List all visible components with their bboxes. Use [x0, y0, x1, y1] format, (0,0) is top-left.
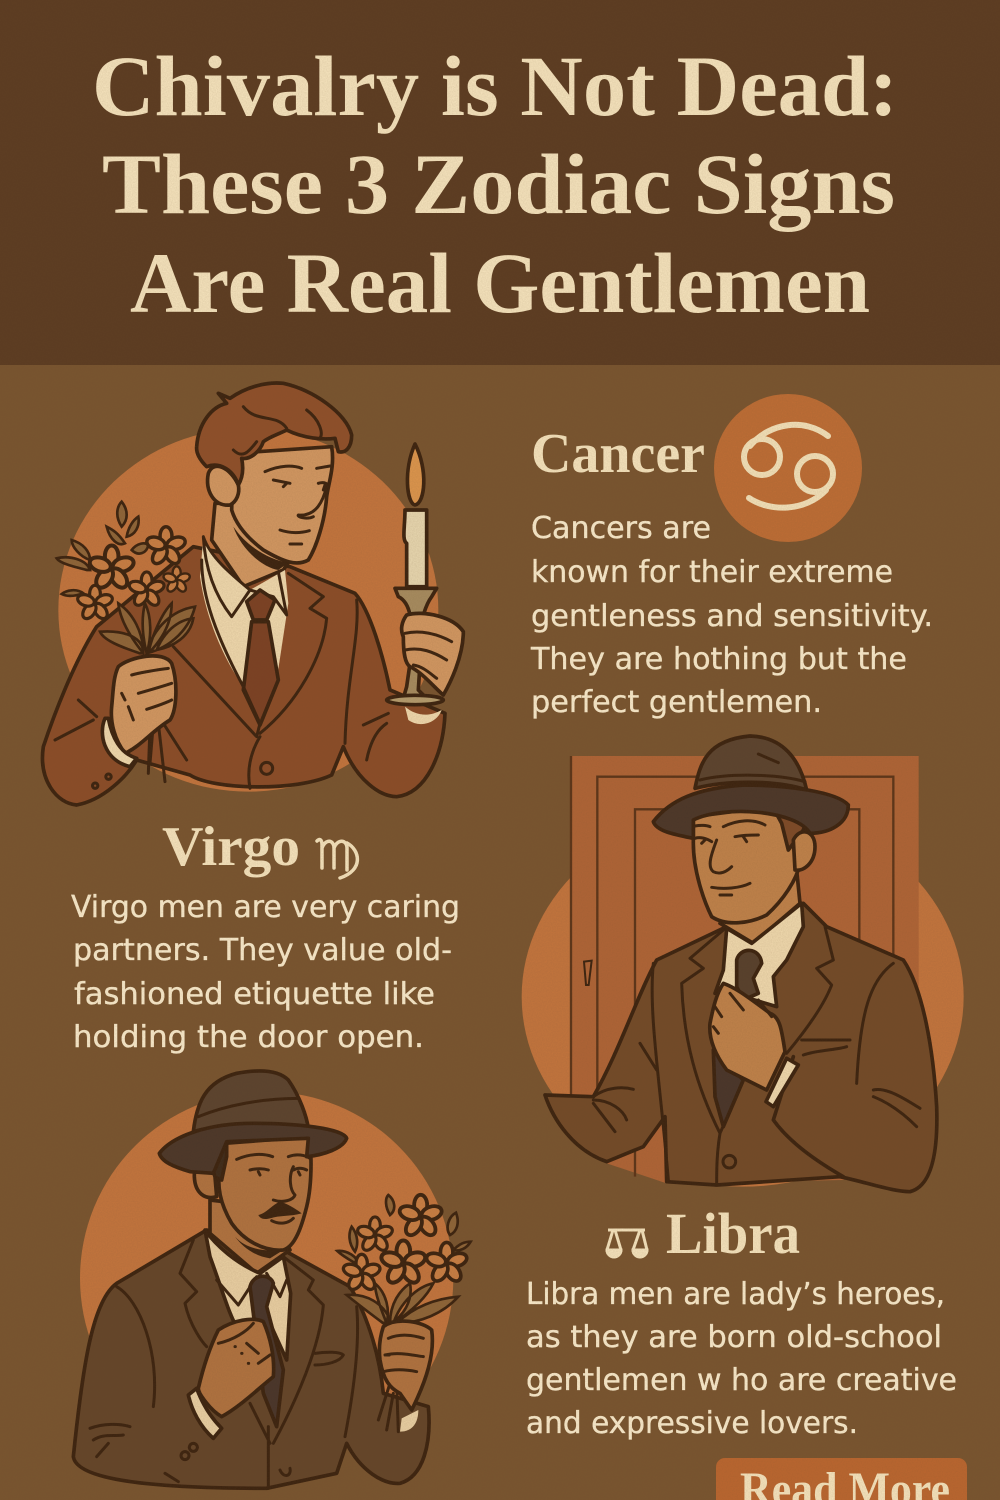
bouquet flowers	[398, 1195, 443, 1238]
collar lines	[217, 1273, 287, 1305]
neck	[212, 503, 297, 587]
illustration: man in hat at door	[522, 736, 964, 1192]
Cancer text: known for their extreme	[531, 555, 893, 590]
lower tie	[713, 1050, 743, 1127]
Cancer text	[530, 511, 933, 720]
sleeve buttons	[92, 774, 111, 788]
Libra text: as they are born old-school	[526, 1320, 942, 1355]
Libra text	[526, 1277, 957, 1441]
header band	[0, 0, 1000, 365]
ear	[208, 466, 239, 505]
right cuff	[400, 1410, 418, 1432]
orange circle backdrop	[80, 1092, 453, 1465]
orange circle backdrop	[58, 428, 438, 792]
necktie	[250, 1276, 283, 1427]
hat band	[700, 754, 805, 782]
candle holder	[395, 588, 437, 698]
fingers	[122, 668, 172, 720]
face	[219, 1137, 311, 1250]
bouquet flowers	[88, 546, 135, 591]
lapels and seams	[90, 1240, 358, 1488]
Virgo heading: Virgo	[162, 816, 300, 878]
collar lines	[203, 537, 287, 617]
Libra heading: Libra	[666, 1201, 800, 1266]
necktie	[243, 590, 278, 725]
icon: Libra scales	[607, 1230, 647, 1257]
Read More button	[716, 1458, 967, 1500]
title: These 3 Zodiac Signs	[102, 136, 895, 232]
neck	[210, 1200, 290, 1273]
right hand	[402, 613, 463, 695]
door frame lines	[571, 756, 893, 1177]
Cancer text: perfect gentlemen.	[531, 685, 822, 720]
Virgo text: holding the door open.	[73, 1020, 424, 1055]
candle base	[387, 695, 443, 705]
door handle	[584, 961, 592, 985]
hand at tie	[710, 983, 785, 1090]
eyes brows nose mouth	[265, 466, 330, 544]
sleeve buttons	[181, 1443, 197, 1460]
jacket button	[723, 1155, 736, 1168]
cuff	[766, 1058, 798, 1107]
shirt	[205, 1230, 291, 1360]
facial features	[695, 821, 765, 895]
Virgo text: fashioned etiquette like	[74, 977, 435, 1012]
door	[571, 756, 919, 1183]
tie knot	[737, 950, 762, 1000]
neck	[720, 870, 800, 943]
shirt and collar	[715, 903, 803, 1007]
orange circle backdrop	[522, 807, 964, 1187]
badge circle	[714, 394, 862, 542]
title: Chivalry is Not Dead:	[92, 38, 898, 134]
Virgo text: partners. They value old-	[73, 933, 452, 968]
title	[92, 38, 898, 331]
Virgo text: Virgo men are very caring	[71, 890, 460, 925]
Cancer text: They are hothing but the	[530, 642, 907, 677]
cancer glyph	[744, 425, 833, 508]
lapels and suit seams	[593, 927, 920, 1185]
right fingers	[405, 632, 452, 678]
hair strands	[233, 407, 321, 454]
button shape	[716, 1458, 967, 1500]
jacket	[43, 547, 445, 805]
brows eyes nose	[237, 1154, 310, 1223]
Cancer symbol badge	[714, 394, 862, 542]
hat crown	[193, 1071, 308, 1132]
finger lines	[713, 993, 772, 1033]
bouquet leaves	[337, 1195, 471, 1323]
hand with bouquet	[379, 1321, 432, 1410]
shirt	[200, 537, 288, 687]
ear	[793, 832, 815, 870]
hand with bouquet	[111, 656, 176, 753]
candle flame	[407, 444, 424, 505]
hat brim	[653, 785, 848, 838]
bouquet leaves	[57, 502, 195, 653]
Libra text: and expressive lovers.	[526, 1406, 858, 1441]
ear	[194, 1164, 217, 1197]
left cuff	[188, 1388, 222, 1438]
Cancer text: Cancers are	[531, 511, 711, 546]
suit	[73, 1230, 429, 1488]
hair	[770, 802, 810, 850]
moustache	[258, 1202, 302, 1219]
right cuff	[405, 707, 442, 724]
hat brim	[159, 1123, 347, 1173]
lapels	[55, 560, 388, 788]
jaw shadow	[235, 1237, 283, 1258]
hat crown	[695, 736, 807, 790]
title: Are Real Gentlemen	[130, 235, 870, 331]
bouquet stems	[148, 723, 187, 782]
hat band	[198, 1098, 298, 1117]
bouquet stems	[378, 1383, 398, 1432]
jaw shadow	[233, 527, 288, 570]
Cancer text: gentleness and sensitivity.	[531, 599, 933, 634]
suit	[545, 903, 937, 1192]
candle	[404, 510, 427, 587]
illustration: man with moustache and flowers	[73, 1071, 471, 1488]
hair	[197, 383, 352, 485]
Libra text: gentlemen w ho are creative	[526, 1363, 957, 1398]
sleeve buttons	[790, 1113, 812, 1133]
hair	[197, 1137, 227, 1180]
Libra text: Libra men are lady’s heroes,	[526, 1277, 945, 1312]
icon: Virgo symbol	[317, 840, 357, 878]
left cuff	[102, 718, 137, 767]
finger lines	[218, 1323, 270, 1363]
Virgo text	[71, 890, 460, 1055]
hand at chest	[198, 1319, 274, 1417]
face	[693, 803, 800, 923]
jacket button	[261, 762, 273, 774]
illustration: young man with flowers and candle	[43, 383, 463, 805]
face	[232, 447, 333, 563]
finger lines	[383, 1335, 423, 1372]
Cancer heading: Cancer	[531, 423, 705, 485]
arm sleeve	[773, 1057, 843, 1177]
